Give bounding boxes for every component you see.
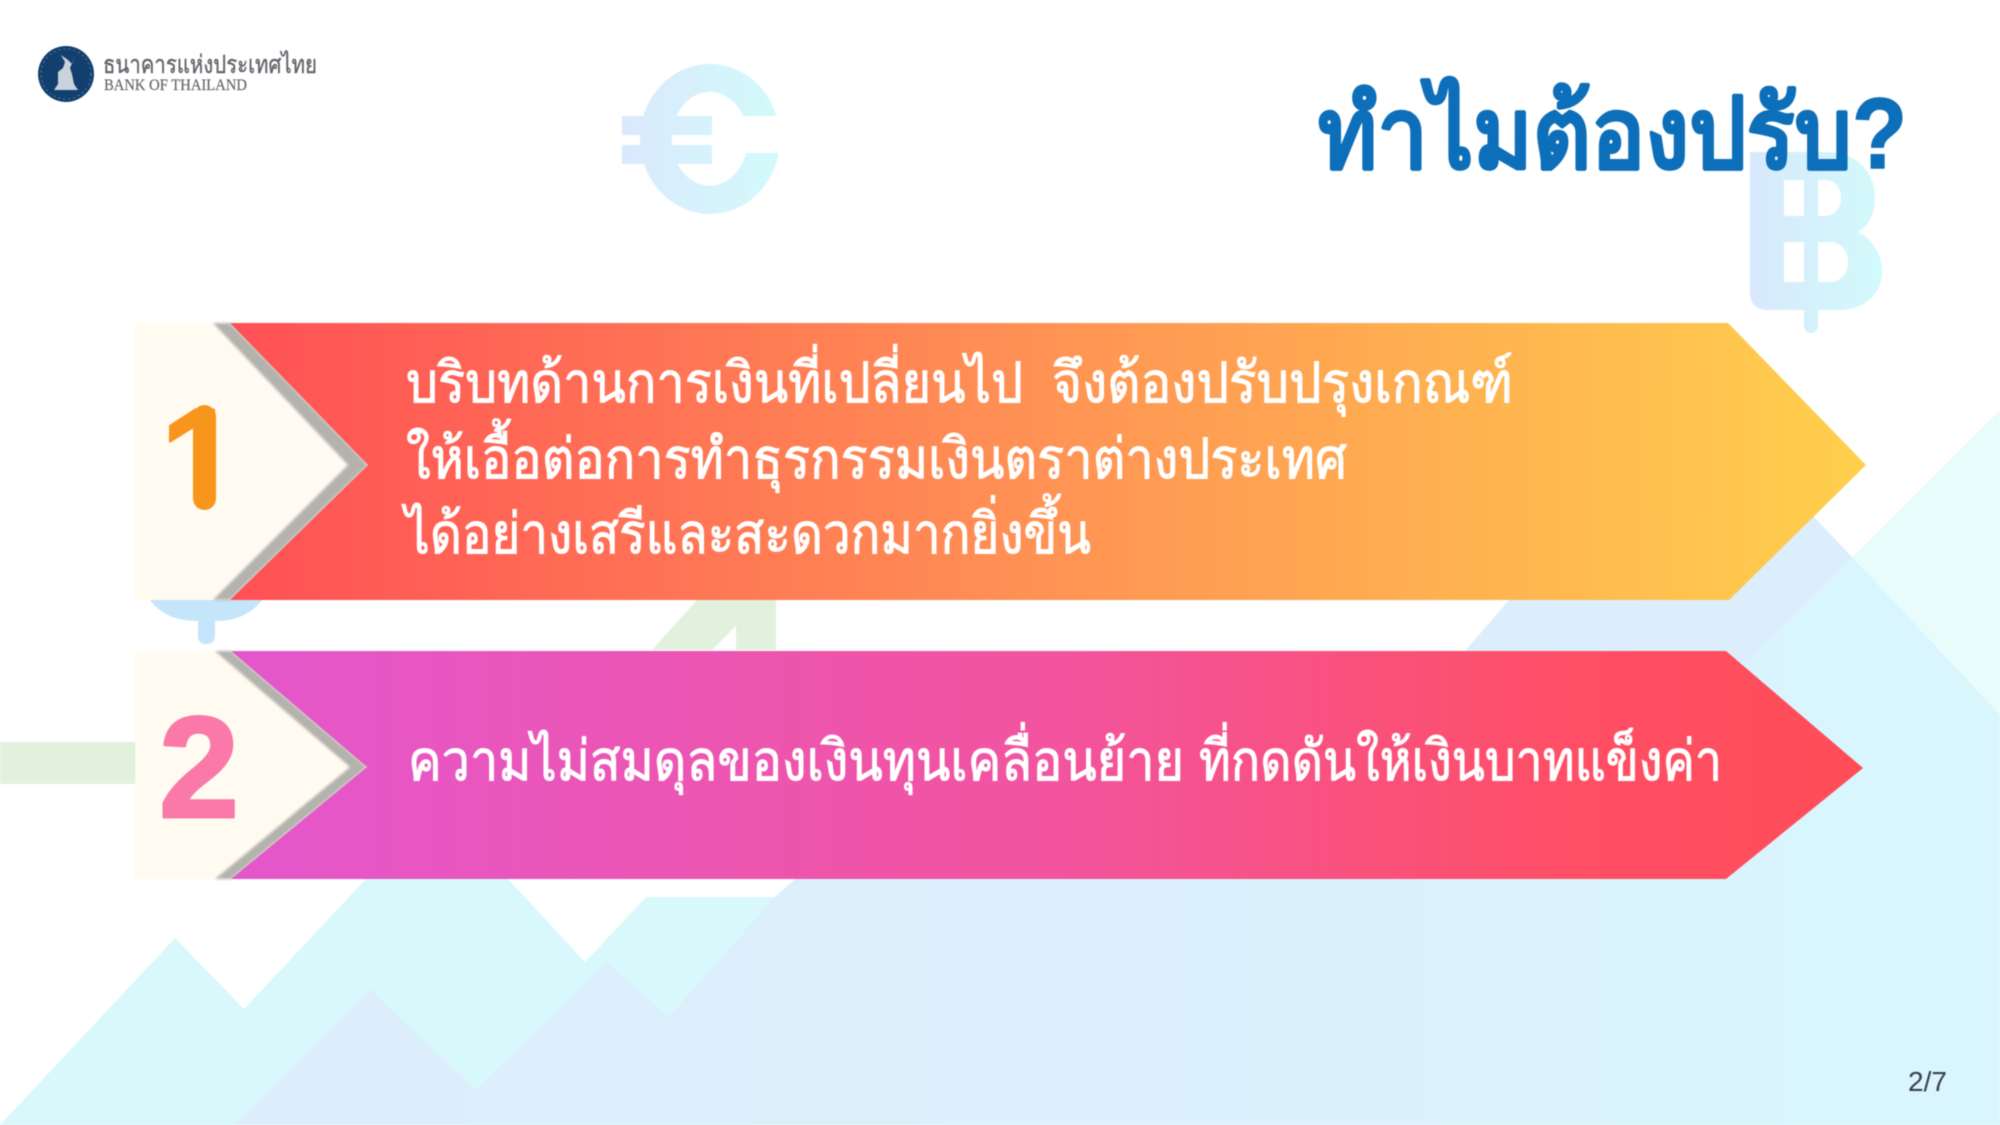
logo: Bank of Thailand bbox=[38, 46, 317, 102]
icon: baht bbox=[1750, 152, 1882, 333]
reason 1 shadow chevron bbox=[213, 323, 368, 600]
icon: currency symbol foot behind arrow bbox=[150, 600, 262, 644]
green chart arrow bbox=[652, 600, 776, 650]
reason 1 arrow body bbox=[230, 323, 1866, 600]
reason 1 text: บริบทด้านการเงินที่เปลี่ยนไป bbox=[406, 344, 1023, 414]
reason 1 text: ให้เอื้อต่อการทำธุรกรรมเงินตราต่างประเทศ bbox=[406, 419, 1347, 493]
green chart line bar bbox=[0, 742, 140, 784]
reason 1 text: จึงต้องปรับปรุงเกณฑ์ bbox=[1052, 351, 1513, 417]
reason 2 arrow body bbox=[231, 651, 1863, 879]
title: ทำไมต้องปรับ? bbox=[1318, 77, 1907, 190]
logo Thai name: ธนาคารแห่งประเทศไทย bbox=[103, 50, 317, 79]
reason 1 text bbox=[401, 344, 1513, 565]
icon: euro bbox=[622, 64, 779, 214]
background: mountain layers bbox=[0, 387, 2000, 1125]
logo emblem bbox=[38, 46, 94, 102]
reason 2 text bbox=[408, 722, 1722, 795]
panel: reason 2 bbox=[135, 651, 1863, 879]
reason 2 text: ความไม่สมดุลของเงินทุนเคลื่อนย้าย bbox=[408, 722, 1184, 795]
reason 1 number tab bbox=[135, 323, 348, 600]
reason 2 number: 2 bbox=[159, 687, 239, 848]
reason 1 number bbox=[168, 404, 217, 511]
reason 2 shadow chevron bbox=[215, 651, 367, 879]
reason 2 text: ที่กดดันให้เงินบาทแข็งค่า bbox=[1199, 722, 1722, 792]
reason 1 text: ได้อย่างเสรีและสะดวกมากยิ่งขึ้น bbox=[401, 494, 1091, 565]
reason 2 number tab bbox=[135, 651, 350, 879]
panel: reason 1 bbox=[135, 323, 1866, 600]
logo English name: BANK OF THAILAND bbox=[104, 77, 247, 94]
page number: 2/7 bbox=[1908, 1066, 1947, 1097]
reason 1 number: 1 bbox=[160, 378, 241, 541]
